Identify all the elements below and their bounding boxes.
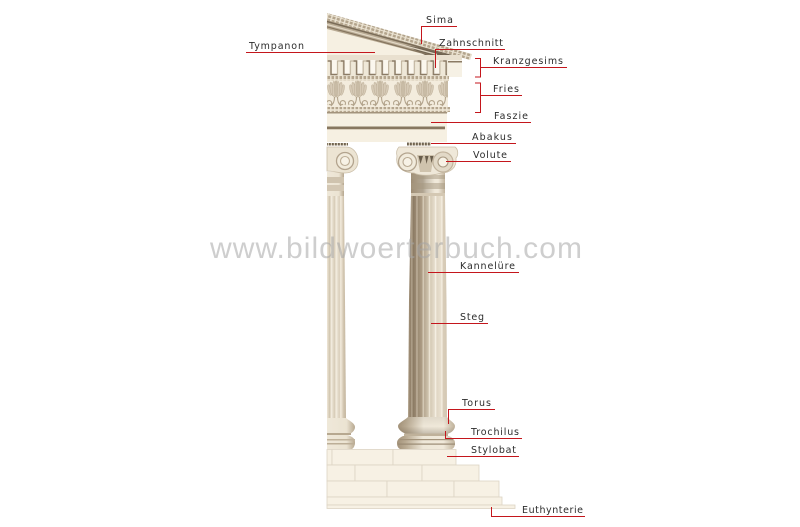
label: Fries (475, 83, 522, 112)
label: Euthynterie (492, 505, 585, 516)
label: Kranzgesims: Kranzgesims (493, 56, 563, 67)
label: Torus (448, 398, 495, 424)
pediment: tympanum (327, 28, 427, 55)
frieze with palmettes (327, 76, 456, 113)
label: Trochilus (446, 427, 522, 438)
right column capital with volutes (397, 142, 458, 175)
label: Euthynterie: Euthynterie (522, 505, 583, 516)
label: Sima: Sima (426, 15, 453, 26)
label: Kannelüre: Kannelüre (460, 261, 515, 272)
label: Tympanon: Tympanon (248, 41, 304, 52)
label: Stylobat (447, 445, 519, 456)
label: Steg: Steg (460, 312, 484, 323)
label: Volute (446, 150, 511, 162)
label: Sima (422, 15, 457, 44)
label: Kranzgesims (475, 56, 567, 77)
left column (327, 143, 358, 449)
temple illustration (327, 13, 515, 508)
label: Faszie (431, 111, 531, 122)
label: Volute: Volute (473, 150, 507, 161)
label: Zahnschnitt (436, 38, 505, 68)
label: Abakus: Abakus (472, 132, 512, 143)
right column neck (411, 172, 445, 196)
label: Torus: Torus (461, 398, 491, 409)
label: Fries: Fries (493, 84, 519, 95)
raking cornice (327, 13, 472, 60)
steps: stylobate (327, 450, 515, 508)
label: Steg (431, 312, 488, 324)
label: Kannelüre (428, 261, 519, 272)
fascia / architrave (327, 112, 447, 142)
label: Abakus (431, 132, 516, 144)
label: Zahnschnitt: Zahnschnitt (439, 38, 503, 49)
right column base: torus and trochilus (397, 417, 455, 449)
watermark: www.bildwoerterbuch.com (209, 232, 582, 265)
label: Trochilus: Trochilus (470, 427, 519, 438)
horizontal cornice (327, 55, 462, 77)
label: Stylobat: Stylobat (471, 445, 516, 456)
label: Faszie: Faszie (494, 111, 528, 122)
right column shaft (408, 195, 447, 418)
label: Tympanon (246, 41, 375, 52)
